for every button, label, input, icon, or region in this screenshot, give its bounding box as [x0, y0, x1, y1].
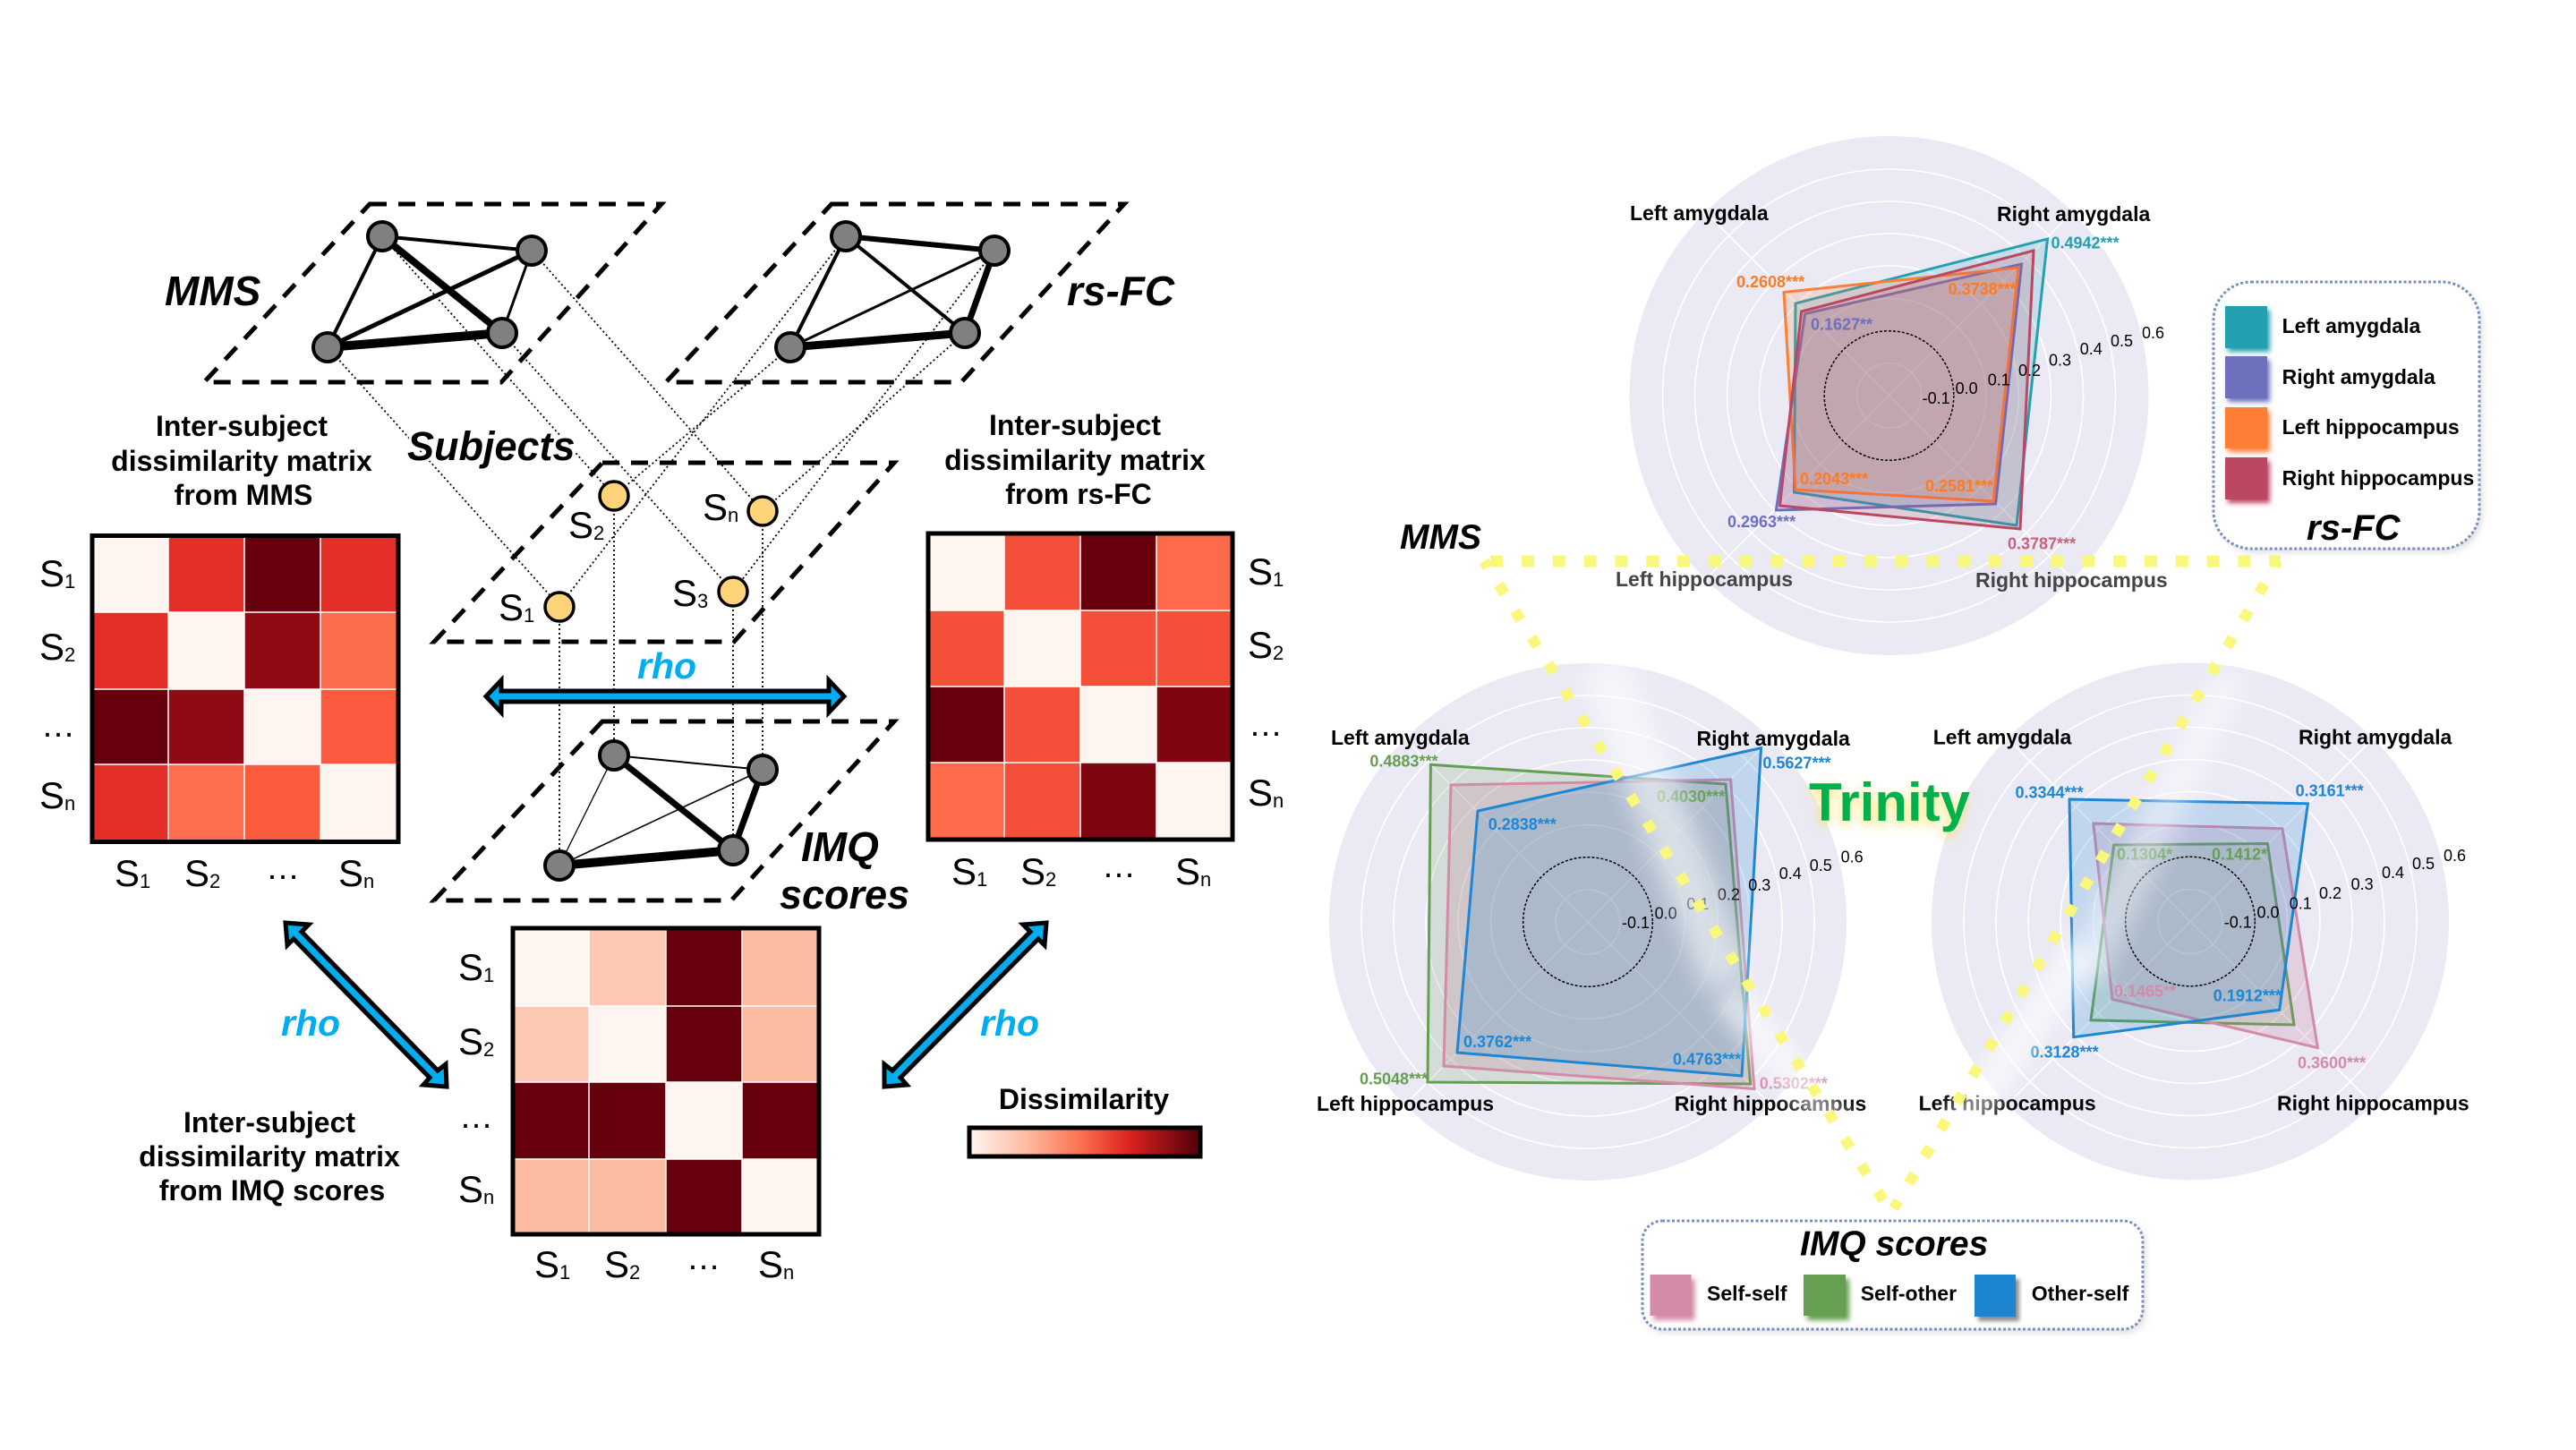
radar: MMS (bottom left): Left amygdala: [1331, 726, 1470, 749]
radar: MMS (bottom left): -0.1: [1622, 914, 1650, 932]
matrix: IMQ scores: S: [458, 946, 483, 988]
legend: IMQ scores: Self-other: [1861, 1282, 1957, 1305]
matrix: MMS: 1: [140, 870, 150, 892]
legend: rs-FC: rs-FC: [2307, 508, 2401, 548]
legend: dissimilarity colorbar: [969, 1083, 1200, 1156]
radar: MMS (bottom left): 0.4883***: [1369, 753, 1437, 771]
radar: rs-FC (top): Right amygdala: [1997, 202, 2150, 226]
label: rho right: rho: [980, 1002, 1039, 1044]
radar: IMQ (bottom right): 0.2: [2319, 884, 2341, 902]
matrix: rs-FC: [926, 532, 1284, 892]
radar: IMQ (bottom right): Right amygdala: [2299, 726, 2452, 749]
heading: IMQ matrix: from IMQ scores: [159, 1174, 385, 1207]
radar: rs-FC (top): 0.0: [1956, 380, 1978, 397]
glow bands along the triangle: [1468, 560, 2291, 1208]
matrix: rs-FC: 2: [1045, 868, 1056, 891]
radar: rs-FC (top): 0.3738***: [1949, 280, 2017, 298]
matrix: MMS: S: [184, 852, 209, 894]
radar: IMQ (bottom right): 0.3600***: [2298, 1054, 2366, 1072]
heading: rs-FC matrix: [944, 409, 1206, 510]
label: rs-FC: rs-FC: [1067, 268, 1175, 314]
matrix: IMQ scores: …: [687, 1240, 721, 1277]
matrix: IMQ scores: n: [483, 1186, 494, 1208]
legend: rs-FC: [2213, 282, 2479, 549]
heading: IMQ matrix: dissimilarity matrix: [139, 1140, 400, 1173]
heading: rs-FC matrix: dissimilarity matrix: [944, 444, 1206, 476]
matrix: rs-FC: n: [1273, 789, 1284, 812]
matrix: MMS: [39, 534, 400, 894]
subject nodes: S: [568, 504, 593, 546]
label: Subjects: Subjects: [407, 423, 576, 469]
radar: MMS (bottom left): 0.4763***: [1673, 1051, 1741, 1069]
heading: IMQ matrix: [139, 1106, 400, 1207]
matrix: IMQ scores: S: [458, 1168, 483, 1210]
radar: MMS (bottom left): 0.3: [1748, 876, 1770, 894]
matrix: rs-FC: 1: [977, 868, 987, 891]
radar: MMS (bottom left): 0.3762***: [1463, 1033, 1531, 1051]
legend: rs-FC: Left amygdala: [2282, 314, 2420, 337]
matrix: MMS: S: [39, 552, 64, 594]
radar: MMS (bottom left): 0.5627***: [1762, 755, 1830, 772]
matrix: IMQ scores: S: [604, 1243, 629, 1285]
matrix: rs-FC: S: [951, 850, 977, 892]
label: rho top: rho: [637, 645, 696, 687]
radar: IMQ (bottom right): -0.1: [2224, 914, 2252, 932]
matrix: MMS: 2: [209, 870, 220, 892]
radar: rs-FC (top): 0.4: [2080, 340, 2103, 358]
label: MMS at triangle vertex: MMS: [1400, 518, 1481, 557]
radar: IMQ (bottom right): 0.3128***: [2030, 1044, 2099, 1062]
radar: rs-FC (top): 0.4942***: [2051, 235, 2120, 252]
heading: MMS matrix: [111, 410, 372, 511]
radar: MMS (bottom left): Right hippocampus: [1675, 1092, 1866, 1115]
radar: MMS (bottom left): 0.0: [1655, 905, 1677, 923]
subject nodes: 3: [697, 590, 708, 612]
radar: MMS (bottom left): 0.4: [1779, 865, 1802, 883]
plane: MMS network: [204, 204, 661, 382]
label: Trinity: Trinity: [1809, 772, 1971, 832]
matrix: rs-FC: S: [1020, 850, 1045, 892]
matrix: MMS: S: [338, 852, 363, 894]
network: IMQ: [545, 741, 777, 880]
radar: rs-FC (top): 0.2581***: [1925, 477, 1993, 495]
radar: rs-FC (top): [1616, 136, 2168, 655]
matrix: IMQ scores: 2: [629, 1261, 640, 1284]
radar: MMS (bottom left): 0.2838***: [1488, 815, 1557, 833]
radar: rs-FC (top): 0.1: [1988, 371, 2010, 389]
radar: rs-FC (top): 0.2608***: [1736, 273, 1804, 291]
subject nodes: 1: [524, 604, 534, 627]
radar: rs-FC (top): 0.6: [2142, 324, 2164, 342]
matrix: rs-FC: …: [1102, 848, 1136, 885]
radar: IMQ (bottom right): [1919, 662, 2469, 1180]
matrix: MMS: …: [266, 849, 300, 887]
subject nodes: S: [672, 572, 697, 614]
radar: MMS (bottom left): Right amygdala: [1697, 727, 1850, 750]
matrix: rs-FC: …: [1249, 706, 1283, 744]
radar: IMQ (bottom right): Left amygdala: [1933, 726, 2072, 749]
legend: IMQ scores: [1642, 1221, 2143, 1329]
radar: rs-FC (top): 0.3: [2049, 352, 2071, 370]
matrix: rs-FC: S: [1248, 772, 1273, 814]
label: IMQ scores: [780, 823, 909, 917]
plane: subjects: [434, 463, 894, 642]
plane: rs-FC network: [666, 204, 1124, 382]
triangle: yellow dotted lines: [1484, 561, 2281, 1208]
radar: MMS (bottom left): 0.6: [1841, 848, 1864, 866]
radar: IMQ (bottom right): 0.0: [2257, 904, 2280, 922]
heading: rs-FC matrix: from rs-FC: [1005, 478, 1152, 510]
radar: IMQ (bottom right): Right hippocampus: [2277, 1092, 2469, 1115]
matrix: MMS: S: [39, 774, 64, 816]
heading: MMS matrix: from MMS: [175, 479, 312, 511]
legend: IMQ scores: Other-self: [2032, 1282, 2129, 1305]
radar: rs-FC (top): 0.2: [2018, 362, 2041, 380]
radar: IMQ (bottom right): 0.3: [2351, 875, 2374, 893]
matrix: MMS: n: [64, 792, 75, 815]
legend: rs-FC: Left hippocampus: [2282, 415, 2460, 439]
label: IMQ scores: IMQ: [801, 823, 879, 870]
matrix: IMQ scores: 1: [559, 1261, 570, 1284]
label: rho left: rho: [281, 1002, 340, 1044]
arrow: horizontal rho: [486, 680, 844, 712]
legend: dissimilarity colorbar: Dissimilarity: [999, 1083, 1169, 1115]
radar: IMQ (bottom right): 0.1304*: [2117, 846, 2172, 864]
legend: rs-FC: Right amygdala: [2282, 365, 2435, 388]
heading: MMS matrix: dissimilarity matrix: [111, 445, 372, 477]
network: MMS: [313, 222, 546, 362]
matrix: IMQ scores: S: [458, 1020, 483, 1062]
radar: rs-FC (top): 0.3787***: [2008, 535, 2076, 553]
plane: IMQ network: [434, 721, 894, 900]
matrix: MMS: 1: [64, 570, 75, 593]
matrix: MMS: S: [115, 852, 140, 894]
radar: rs-FC (top): 0.5: [2111, 332, 2133, 350]
legend: IMQ scores: Self-self: [1707, 1282, 1787, 1305]
dotted connections between networks and subjects: [328, 236, 994, 866]
radar: MMS (bottom left): 0.5048***: [1360, 1070, 1428, 1088]
radar: MMS (bottom left): [1317, 663, 1866, 1181]
subject nodes: S: [703, 486, 728, 528]
radar: IMQ (bottom right): 0.1912***: [2213, 986, 2282, 1004]
matrix: MMS: …: [41, 707, 75, 745]
radar: IMQ (bottom right): 0.1412*: [2212, 846, 2267, 864]
matrix: IMQ scores: S: [758, 1243, 783, 1285]
radar: rs-FC (top): 0.2963***: [1727, 513, 1796, 531]
subject nodes: n: [728, 504, 738, 526]
heading: IMQ matrix: Inter-subject: [183, 1106, 355, 1139]
matrix: IMQ scores: 2: [483, 1038, 494, 1061]
matrix: IMQ scores: S: [534, 1243, 559, 1285]
matrix: IMQ scores: n: [783, 1261, 794, 1284]
radar: IMQ (bottom right): 0.1: [2290, 895, 2312, 913]
subject nodes: [499, 482, 777, 628]
matrix: rs-FC: 2: [1273, 642, 1284, 664]
radar: IMQ (bottom right): 0.5: [2412, 855, 2435, 873]
radar: IMQ (bottom right): 0.3344***: [2016, 783, 2084, 801]
radar: rs-FC (top): Left hippocampus: [1616, 567, 1793, 591]
legend: IMQ scores: IMQ scores: [1800, 1225, 1988, 1264]
radar: rs-FC (top): -0.1: [1923, 389, 1950, 407]
arrow: left diagonal rho: [286, 923, 447, 1087]
radar: MMS (bottom left): 0.1: [1686, 895, 1709, 913]
radar: rs-FC (top): Left amygdala: [1630, 201, 1769, 225]
radar: rs-FC (top): 0.2043***: [1800, 470, 1868, 488]
matrix: MMS: n: [363, 870, 374, 892]
radar: IMQ (bottom right): Left hippocampus: [1919, 1092, 2096, 1115]
matrix: IMQ scores: …: [459, 1098, 493, 1136]
matrix: IMQ scores: 1: [483, 964, 494, 986]
subject nodes: S: [499, 586, 524, 628]
radar: MMS (bottom left): 0.5302***: [1760, 1074, 1828, 1092]
radar: MMS (bottom left): 0.5: [1810, 857, 1832, 874]
radar: IMQ (bottom right): 0.3161***: [2296, 782, 2364, 800]
subject nodes: 2: [593, 522, 604, 544]
heading: MMS matrix: Inter-subject: [156, 410, 328, 442]
matrix: MMS: S: [39, 626, 64, 668]
matrix: rs-FC: n: [1200, 868, 1211, 891]
radar: IMQ (bottom right): 0.1465**: [2114, 983, 2176, 1001]
arrow: right diagonal rho: [884, 923, 1046, 1087]
matrix: rs-FC: S: [1248, 624, 1273, 666]
radar: MMS (bottom left): Left hippocampus: [1317, 1092, 1494, 1115]
label: MMS: MMS: [165, 268, 261, 314]
matrix: IMQ scores: [458, 926, 821, 1285]
radar: rs-FC (top): 0.1627**: [1811, 316, 1872, 334]
matrix: MMS: 2: [64, 644, 75, 666]
radar: IMQ (bottom right): 0.6: [2444, 847, 2466, 865]
radar: MMS (bottom left): 0.4030***: [1657, 788, 1725, 806]
heading: rs-FC matrix: Inter-subject: [989, 409, 1161, 441]
matrix: rs-FC: S: [1248, 550, 1273, 593]
radar: IMQ (bottom right): 0.4: [2382, 864, 2404, 882]
matrix: rs-FC: S: [1175, 850, 1200, 892]
legend: rs-FC: Right hippocampus: [2282, 466, 2474, 490]
radar: rs-FC (top): Right hippocampus: [1975, 568, 2168, 592]
matrix: rs-FC: 1: [1273, 568, 1284, 591]
label: IMQ scores: scores: [780, 872, 909, 917]
radar: MMS (bottom left): 0.2: [1718, 886, 1740, 904]
network: rs-FC: [776, 222, 1009, 362]
